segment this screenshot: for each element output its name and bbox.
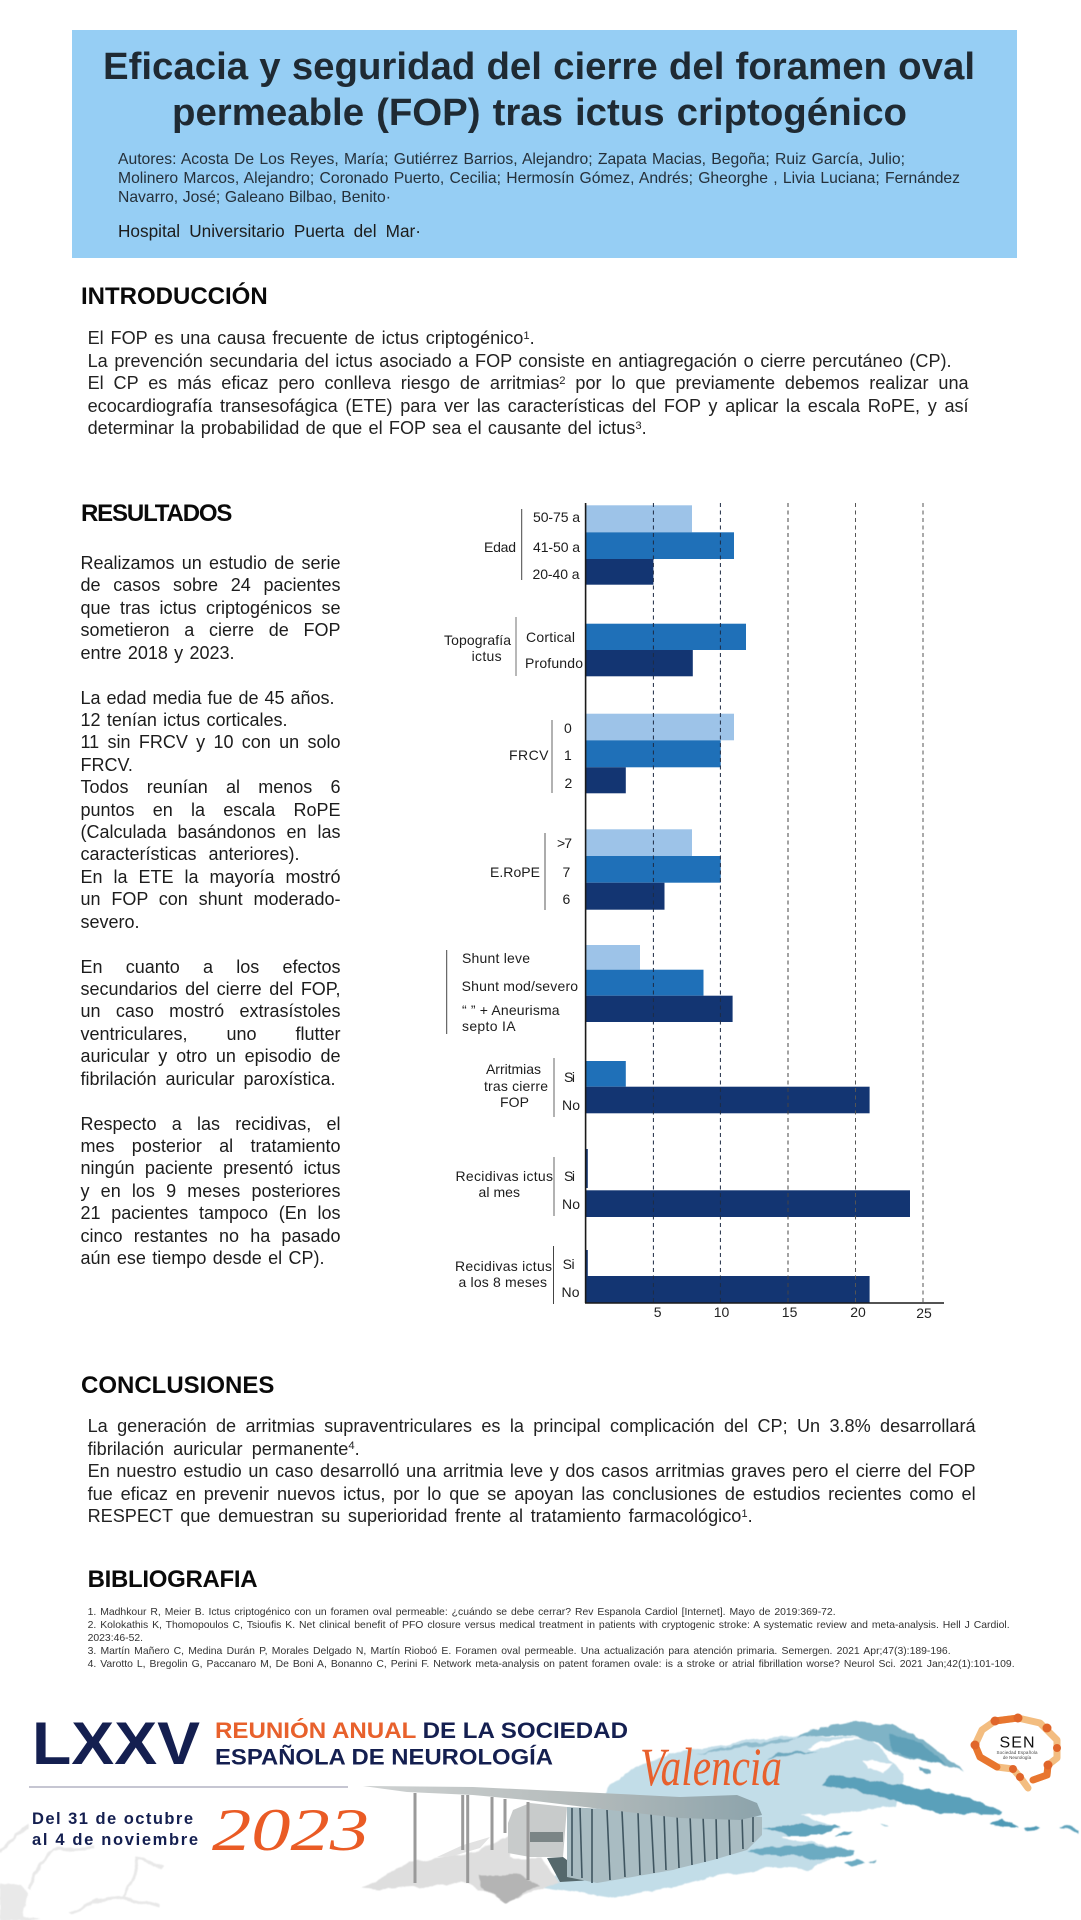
group: Recidivas ictus al mes — [456, 1149, 910, 1217]
group: E.RoPE — [490, 829, 721, 910]
text: resultados: aún ese tiempo desde el CP). — [80, 1248, 324, 1268]
text: resultados: cinco restantes no ha pasado — [80, 1226, 340, 1246]
axis tick labels — [654, 1304, 932, 1321]
group: Shunt: Shunt mod/severo — [462, 978, 578, 994]
SEN logo — [970, 1714, 1061, 1788]
authors: Autores: Acosta De Los Reyes, María; Gutiérrez Barrios, Alejandro; Zapata Macias, Begoña; Ruiz García, Julio; — [118, 151, 905, 168]
group: FRCV: 0 — [564, 720, 572, 736]
group: Topografía ictus: Profundo — [525, 655, 583, 671]
references list: 2023:46-52. — [88, 1633, 143, 1644]
group: Edad — [484, 505, 734, 585]
axis tick labels: 15 — [782, 1304, 798, 1320]
group: E.RoPE: 7 — [562, 864, 570, 880]
text: resultados: La edad media fue de 45 años. — [80, 688, 334, 708]
group: Shunt — [447, 945, 733, 1034]
references list: 2. Kolokathis K, Thomopoulos C, Tsioufis K. Net clinical benefit of PFO closure versus medical treatment in patients with cryptogenic stroke: A systematic review and meta-analysis. Hell J Cardiol. — [88, 1620, 1010, 1631]
group: E.RoPE: >7 — [557, 835, 572, 851]
dates: al 4 de noviembre — [32, 1831, 198, 1849]
text: resultados: fibrilación auricular paroxística. — [80, 1069, 336, 1089]
group: Edad: 41-50 a — [533, 539, 580, 555]
text: resultados: entre 2018 y 2023. — [80, 643, 234, 663]
dates — [32, 1810, 198, 1849]
group: Edad: Edad — [484, 539, 516, 555]
year 2023: 2023 — [212, 1797, 369, 1863]
text: conclusiones: fibrilación auricular permanente4. — [88, 1438, 360, 1458]
group: Shunt: “ ” + Aneurisma — [462, 1002, 560, 1018]
SEN logo: SEN — [1000, 1734, 1034, 1752]
SEN logo: de Neurología — [1003, 1755, 1032, 1760]
text: resultados: FRCV. — [80, 755, 133, 775]
text: resultados: de casos sobre 24 pacientes — [80, 575, 340, 595]
text: resultados: 11 sin FRCV y 10 con un solo — [80, 732, 340, 752]
marble veins decoration — [0, 1827, 163, 1920]
authors: Molinero Marcos, Alejandro; Coronado Puerto, Cecilia; Hermosín Gómez, Andrés; Gheorghe , Livia Luciana; Fernández — [118, 170, 960, 187]
title — [103, 45, 975, 134]
watercolor wash — [543, 1722, 1077, 1898]
text: conclusiones: La generación de arritmias supraventriculares es la principal complicación del CP; Un 3.8% desarrollará — [88, 1416, 976, 1436]
group: Arritmias tras cierre FOP — [484, 1058, 870, 1117]
axis tick labels: 10 — [714, 1304, 729, 1320]
text: resultados: un caso mostró extrasístoles — [80, 1001, 340, 1021]
group: Shunt: septo IA — [462, 1018, 516, 1034]
text: resultados: sometieron a cierre de FOP — [80, 620, 340, 640]
text: conclusiones: RESPECT que demuestran su superioridad frente al tratamiento farmacológico1. — [88, 1506, 753, 1526]
group: Shunt: Shunt leve — [462, 950, 530, 966]
references list: 3. Martín Mañero C, Medina Durán P, Morales Delgado N, Martín Rioboó E. Foramen oval permeable. Una actualización para atención primaria. Semergen. 2021 Apr;47(3):189-196. — [88, 1646, 951, 1657]
group: FRCV — [509, 714, 734, 793]
references list — [88, 1607, 1015, 1670]
group: Recidivas ictus a los 8 meses — [455, 1246, 870, 1304]
group: Edad: 20-40 a — [532, 566, 580, 582]
text: resultados: En cuanto a los efectos — [80, 957, 340, 977]
building illustration — [360, 1786, 762, 1902]
group: Recidivas ictus al mes: al mes — [478, 1184, 520, 1200]
text: resultados: auricular y otro un episodio de — [80, 1046, 340, 1066]
group: Recidivas ictus al mes: No — [562, 1196, 580, 1212]
group: Recidivas ictus a los 8 meses: a los 8 meses — [458, 1274, 547, 1290]
text: resultados: (Calculada basándonos en las — [80, 822, 340, 842]
group: Recidivas ictus al mes: Recidivas ictus — [456, 1168, 553, 1184]
group: FRCV: 2 — [564, 775, 572, 791]
title: permeable (FOP) tras ictus criptogénico — [172, 91, 907, 134]
text: resultados: 21 pacientes tampoco (En los — [80, 1203, 340, 1223]
text: resultados: Respecto a las recidivas, el — [80, 1114, 340, 1134]
group: Arritmias tras cierre FOP: FOP — [500, 1094, 529, 1110]
heading: bibliografía: BIBLIOGRAFIA — [88, 1566, 257, 1593]
heading: conclusiones: CONCLUSIONES — [81, 1372, 274, 1399]
axis tick labels: 25 — [916, 1305, 932, 1321]
text: resultados: ventriculares, uno flutter — [80, 1024, 340, 1044]
dates: Del 31 de octubre — [32, 1810, 193, 1828]
group: Topografía ictus: ictus — [472, 648, 502, 664]
text: introducción: El FOP es una causa frecuente de ictus criptogénico1. — [88, 328, 535, 348]
group: Arritmias tras cierre FOP: Si — [564, 1069, 575, 1085]
group: Recidivas ictus al mes: Si — [564, 1168, 575, 1184]
hospital: Hospital Universitario Puerta del Mar· — [118, 221, 421, 241]
congress name: ESPAÑOLA DE NEUROLOGÍA — [215, 1744, 553, 1770]
references list: 4. Varotto L, Bregolin G, Paccanaro M, De Boni A, Bonanno C, Perini F. Network meta-analysis on patent foramen ovale: is a stroke or atrial fibrillation worse? Neurol Sci. 2021 Jan;42(1):101-109. — [88, 1659, 1015, 1670]
group: Edad: 50-75 a — [533, 509, 580, 525]
SEN logo: Sociedad Española — [996, 1750, 1038, 1755]
text: introducción: determinar la probabilidad de que el FOP sea el causante del ictus3. — [88, 418, 647, 438]
axis tick labels: 20 — [850, 1304, 866, 1320]
title: Eficacia y seguridad del cierre del foramen oval — [103, 45, 975, 88]
group: Topografía ictus — [444, 617, 746, 676]
text: resultados: mes posterior al tratamiento — [80, 1136, 340, 1156]
text: resultados: 12 tenían ictus corticales. — [80, 710, 288, 730]
heading: resultados: RESULTADOS — [81, 500, 231, 527]
bar chart — [444, 503, 944, 1321]
group: Recidivas ictus a los 8 meses: Recidivas ictus — [455, 1258, 552, 1274]
group: Topografía ictus: Topografía — [444, 632, 511, 648]
group: FRCV: FRCV — [509, 747, 549, 763]
text: resultados: y en los 9 meses posteriores — [80, 1181, 340, 1201]
text: resultados: que tras ictus criptogénicos se — [80, 598, 340, 618]
authors — [118, 151, 960, 206]
congress number: LXXV — [32, 1710, 200, 1777]
axes — [585, 503, 944, 1303]
text: resultados: un FOP con shunt moderado- — [80, 889, 340, 909]
references list: 1. Madhkour R, Meier B. Ictus criptogénico con un foramen oval permeable: ¿cuándo se debe cerrar? Rev Espanola Cardiol [Internet]. Mayo de 2019:369-72. — [88, 1607, 836, 1618]
city name Valencia: Valencia — [640, 1737, 782, 1797]
group: Recidivas ictus a los 8 meses: Si — [563, 1256, 575, 1272]
text: resultados: características anteriores). — [80, 844, 300, 864]
group: E.RoPE: 6 — [562, 891, 570, 907]
congress banner — [0, 1710, 1080, 1920]
congress name: REUNIÓN ANUAL DE LA SOCIEDAD — [215, 1718, 628, 1743]
text: resultados: severo. — [80, 912, 140, 932]
text: introducción: El CP es más eficaz pero conlleva riesgo de arritmias2 por lo que previamente debemos realizar una — [88, 373, 969, 393]
text: resultados: secundarios del cierre del FOP, — [80, 979, 340, 999]
congress name — [215, 1718, 628, 1770]
text: conclusiones — [88, 1416, 976, 1526]
text: introducción: La prevención secundaria del ictus asociado a FOP consiste en antiagregación o cierre percutáneo (CP). — [88, 350, 952, 370]
group: Arritmias tras cierre FOP: No — [562, 1097, 580, 1113]
group: FRCV: 1 — [564, 747, 572, 763]
panel: title header — [72, 30, 1017, 258]
authors: Navarro, José; Galeano Bilbao, Benito· — [118, 189, 391, 206]
axis tick labels: 5 — [654, 1304, 662, 1320]
text: resultados: puntos en la escala RoPE — [80, 800, 340, 820]
group: Recidivas ictus a los 8 meses: No — [562, 1284, 580, 1300]
heading: introducción: INTRODUCCIÓN — [81, 283, 268, 310]
text: resultados: ningún paciente presentó ictus — [80, 1158, 340, 1178]
text: resultados: En la ETE la mayoría mostró — [80, 867, 340, 887]
text: resultados: Todos reunían al menos 6 — [80, 777, 340, 797]
text: resultados — [80, 553, 340, 1268]
text: conclusiones: fue eficaz en prevenir nuevos ictus, por lo que se apoyan las conclusiones de estudios recientes como el — [88, 1484, 976, 1504]
text: introducción — [88, 328, 969, 438]
text: introducción: ecocardiografía transesofágica (ETE) para ver las características del FOP y aplicar la escala RoPE, y así — [88, 396, 969, 416]
text: resultados: Realizamos un estudio de serie — [80, 553, 340, 573]
group: Arritmias tras cierre FOP: tras cierre — [484, 1078, 548, 1094]
group: Arritmias tras cierre FOP: Arritmias — [486, 1061, 541, 1077]
group: Topografía ictus: Cortical — [526, 629, 575, 645]
group: E.RoPE: E.RoPE — [490, 864, 540, 880]
text: conclusiones: En nuestro estudio un caso desarrolló una arritmia leve y dos casos arritmias graves pero el cierre del FOP — [88, 1461, 976, 1481]
